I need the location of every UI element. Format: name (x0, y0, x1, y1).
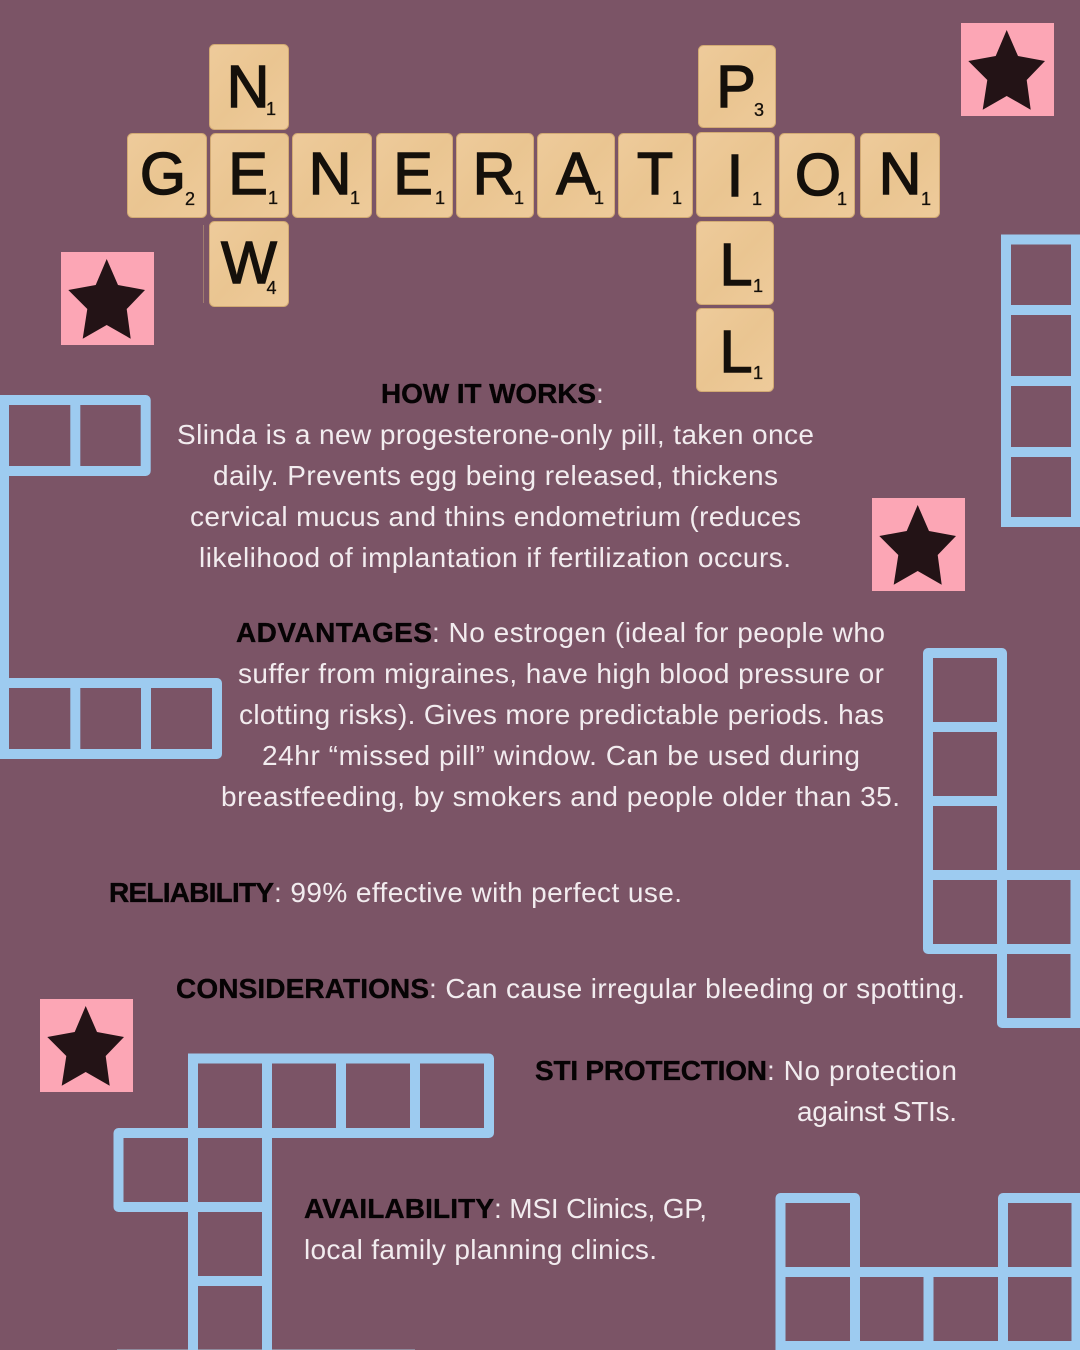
text block: STI protection (535, 1055, 957, 1127)
text block: considerations: : Can cause irregular bleeding or spotting. (429, 973, 965, 1004)
tile N (860, 134, 940, 218)
tile L: 1 (753, 363, 763, 383)
tile R: R (473, 141, 515, 207)
text block: advantages: ADVANTAGES (236, 617, 432, 648)
tile G: G (140, 141, 186, 207)
text block: availability: AVAILABILITY (304, 1193, 494, 1224)
tile L: 1 (753, 276, 763, 296)
crossword grid: left (0, 400, 217, 754)
text block: how it works (177, 378, 814, 573)
crossword grid: bottom left (118, 1058, 489, 1350)
tile T: T (637, 141, 673, 207)
tile N: N (227, 54, 269, 120)
tile P (698, 46, 776, 128)
crossword grid: middle right (928, 653, 1080, 1023)
tile T (618, 134, 692, 218)
tile N: 1 (266, 99, 276, 119)
tile W (210, 222, 288, 306)
tile N: 1 (350, 188, 360, 208)
text block: advantages: breastfeeding, by smokers and people older than 35. (221, 781, 900, 812)
star tile: top right (961, 23, 1054, 116)
tile W: 4 (266, 278, 277, 298)
text block: STI protection: STI PROTECTION (535, 1055, 767, 1086)
text block: how it works: likelihood of implantation if fertilization occurs. (199, 542, 791, 573)
text block: STI protection: against STIs. (797, 1096, 957, 1127)
text block: availability: : MSI Clinics, GP, (494, 1193, 707, 1224)
tile A: 1 (594, 188, 604, 208)
text block: availability (304, 1193, 707, 1265)
star tile: lower left (40, 999, 133, 1092)
tile T: 1 (672, 188, 682, 208)
tile A (538, 134, 614, 218)
tile L (696, 308, 774, 392)
tile W: W (221, 230, 277, 296)
tile O (780, 134, 854, 218)
tile E: E (393, 141, 433, 207)
tile G: 2 (185, 189, 195, 209)
tile L: L (720, 319, 752, 385)
text block: considerations (176, 973, 965, 1004)
text block: considerations: CONSIDERATIONS (176, 973, 429, 1004)
text block: how it works: daily. Prevents egg being released, thickens (213, 460, 778, 491)
text block: STI protection: : No protection (767, 1055, 957, 1086)
tile N: N (879, 141, 921, 207)
text block: reliability: : 99% effective with perfect use. (274, 877, 682, 908)
tile N (210, 44, 288, 130)
text block: advantages: suffer from migraines, have high blood pressure or (238, 658, 884, 689)
text block: how it works: Slinda is a new progesterone-only pill, taken once (177, 419, 814, 450)
text block: reliability: RELIABILITY (109, 877, 274, 908)
tile G (128, 134, 206, 218)
text block: how it works: HOW IT WORKS (381, 378, 596, 409)
crossword grid: top right (1006, 240, 1080, 522)
tile E: 1 (268, 188, 278, 208)
tile N: 1 (921, 189, 931, 209)
star tile: middle right (872, 498, 965, 591)
tile E (376, 134, 452, 218)
text block: advantages: : No estrogen (ideal for people who (432, 617, 885, 648)
tile L (696, 222, 774, 304)
text block: how it works: cervical mucus and thins endometrium (reduces (190, 501, 801, 532)
tile I (696, 132, 774, 216)
tile A: A (556, 141, 596, 207)
tile E (210, 134, 288, 218)
tile E: 1 (435, 188, 445, 208)
tile N: N (309, 141, 351, 207)
title: scrabble tiles New Generation Pill (128, 44, 940, 392)
tile L: L (720, 232, 752, 298)
tile R (456, 134, 534, 218)
tile O: O (795, 142, 841, 208)
tile E: E (228, 141, 268, 207)
crossword grid: bottom right (780, 1198, 1080, 1350)
tile I: I (727, 143, 743, 209)
tile N (292, 134, 372, 218)
text block: how it works: : (596, 378, 604, 409)
text block: advantages: clotting risks). Gives more predictable periods. has (239, 699, 884, 730)
star tile: left (61, 252, 154, 345)
tile R: 1 (514, 188, 524, 208)
tile I: 1 (752, 189, 762, 209)
tile O: 1 (837, 189, 847, 209)
text block: advantages (221, 617, 900, 812)
tile P: P (716, 54, 756, 120)
text block: availability: local family planning clinics. (304, 1234, 657, 1265)
text block: advantages: 24hr “missed pill” window. Can be used during (262, 740, 860, 771)
tile P: 3 (754, 100, 764, 120)
